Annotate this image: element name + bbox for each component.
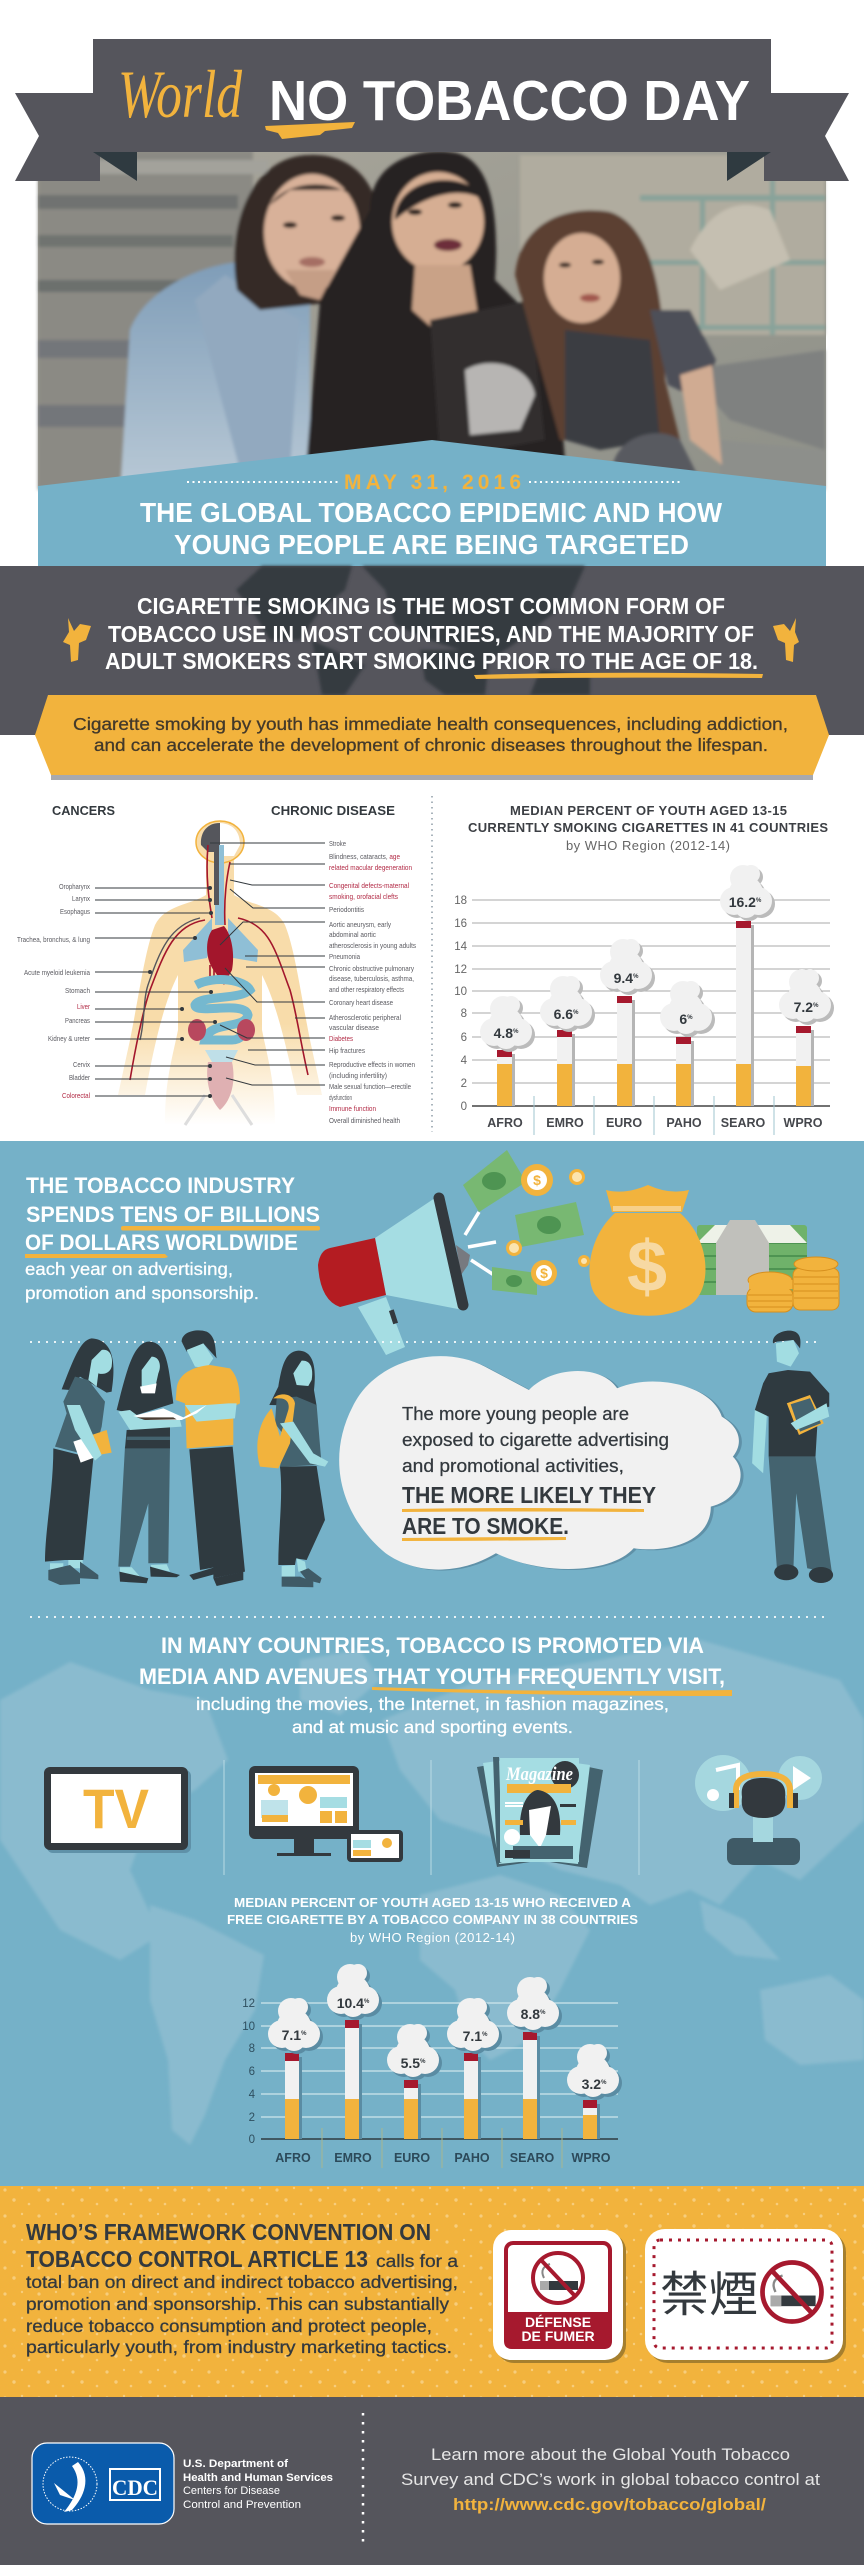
x axis labels: SEARO	[721, 1116, 766, 1130]
bar: EMRO 10.4: %	[364, 1999, 370, 2005]
chart title: CURRENTLY SMOKING CIGARETTES IN 41 COUNTRIES	[468, 820, 828, 835]
grid lines and axis	[472, 900, 830, 1106]
cancer labels: Bladder	[69, 1073, 90, 1082]
y axis labels: 14	[454, 941, 468, 953]
learn more text: Learn more about the Global Youth Tobacco	[431, 2445, 790, 2464]
bar: WPRO 7.2: 7.2	[794, 999, 813, 1015]
cancer labels: Acute myeloid leukemia	[24, 968, 91, 977]
bar: WPRO 3.2	[567, 2044, 622, 2139]
student: girl with book	[45, 1338, 114, 1585]
title: World script: World	[118, 56, 243, 132]
y axis labels: 6	[461, 1032, 467, 1044]
human body illustration	[118, 821, 322, 1125]
chronic disease labels: vascular disease	[329, 1023, 379, 1032]
heading and body text	[26, 2219, 458, 2357]
y axis labels: 2	[249, 2112, 255, 2124]
heading: promotion via media	[139, 1633, 725, 1737]
text: tobacco industry spending: each year on advertising,	[25, 1259, 233, 1279]
bar: WPRO 3.2: 3.2	[582, 2076, 601, 2092]
icon: right star with stem	[773, 618, 799, 662]
panel: body diagram of smoking diseases	[17, 796, 432, 1132]
callout: health consequences ribbon: Cigarette smoking by youth has immediate health consequences, including addiction,	[73, 714, 788, 734]
bar: EURO 5.5: %	[420, 2059, 426, 2065]
text: tobacco industry spending: THE TOBACCO INDUSTRY	[26, 1173, 295, 1198]
divider: dotted rule	[30, 1616, 828, 1618]
bar: EMRO 6.6: 6.6	[554, 1006, 573, 1022]
chronic disease labels: abdominal aortic	[329, 930, 376, 939]
cancer labels: Colorectal	[62, 1091, 90, 1100]
y axis labels: 8	[249, 2043, 255, 2055]
bar: PAHO 7.1: %	[482, 2032, 488, 2038]
heading: promotion via media: IN MANY COUNTRIES, TOBACCO IS PROMOTED VIA	[161, 1633, 704, 1658]
panel: cigarette smoking statement	[0, 566, 864, 735]
cancer labels: Kidney & ureter	[48, 1034, 90, 1043]
icon: TV	[44, 1767, 191, 1853]
bar: EMRO 10.4: 10.4	[337, 1995, 364, 2011]
heading: promotion via media: MEDIA AND AVENUES THAT YOUTH FREQUENTLY VISIT,	[139, 1664, 725, 1689]
learn more text: http://www.cdc.gov/tobacco/global/	[453, 2495, 766, 2514]
sign: no smoking in Chinese	[645, 2229, 846, 2363]
banner: left fold	[93, 152, 137, 181]
y axis labels: 10	[454, 986, 467, 998]
x axis labels: PAHO	[454, 2151, 490, 2165]
illustration: four students	[45, 1330, 328, 1587]
icon: left star with stem	[63, 618, 91, 662]
agency name: U.S. Department of	[183, 2458, 288, 2470]
bar: PAHO 7.1: 7.1	[463, 2028, 482, 2044]
heading and body text: WHO’S FRAMEWORK CONVENTION ON	[26, 2219, 431, 2245]
banner: right fold	[727, 152, 771, 181]
chart: median percent of youth currently smoking	[454, 803, 834, 1135]
chart title: by WHO Region (2012-14)	[566, 838, 730, 853]
student: girl with backpack	[257, 1351, 328, 1587]
title: brush underline	[265, 122, 355, 139]
underline: that youth frequently visit	[372, 1687, 732, 1696]
brush underline	[474, 673, 763, 679]
underline: are to smoke	[402, 1537, 566, 1541]
cancer labels: Esophagus	[60, 907, 90, 916]
bar: AFRO 4.8	[480, 996, 535, 1106]
callout: health consequences ribbon: and can accelerate the development of chronic diseases throughout the lifespan.	[94, 735, 768, 755]
chronic disease labels: Coronary heart disease	[329, 998, 393, 1007]
statement text	[105, 593, 758, 674]
student: boy in orange shirt	[133, 1330, 245, 1586]
agency name: Control and Prevention	[183, 2499, 301, 2511]
heading and body text: promotion and sponsorship. This can substantially	[26, 2294, 449, 2314]
callout: cloud with exposure message	[339, 1356, 744, 1571]
y axis labels: 18	[454, 895, 467, 907]
x axis labels: AFRO	[487, 1116, 523, 1130]
bar: AFRO 4.8: %	[513, 1029, 519, 1035]
cancer labels: Trachea, bronchus, & lung	[17, 935, 90, 944]
panel: blue background	[0, 1141, 864, 2186]
bar: PAHO 6: 6	[679, 1011, 687, 1027]
chronic disease labels: related macular degeneration	[329, 863, 412, 872]
chronic disease labels: Reproductive effects in women	[329, 1060, 415, 1069]
heading and body text: particularly youth, from industry marketing tactics.	[26, 2337, 452, 2357]
chart title: by WHO Region (2012-14)	[350, 1930, 515, 1945]
chronic disease labels: (including infertility)	[329, 1071, 387, 1080]
agency name: Health and Human Services	[183, 2472, 333, 2484]
date: MAY 31, 2016	[344, 471, 521, 494]
bar: EMRO 6.6	[540, 976, 595, 1106]
logo: HHS and CDC	[32, 2443, 174, 2524]
chronic disease labels: Atherosclerotic peripheral	[329, 1013, 401, 1022]
sign: no smoking in Chinese: 禁煙	[660, 2255, 758, 2325]
x axis labels: SEARO	[510, 2151, 555, 2165]
bar: EMRO 10.4	[327, 1964, 382, 2139]
text: tobacco industry spending: promotion and sponsorship.	[25, 1283, 259, 1303]
icon: coins	[506, 1164, 590, 1286]
divider: dotted rule	[30, 1341, 818, 1343]
bar: EURO 9.4: 9.4	[614, 970, 633, 986]
bar: AFRO 7.1: %	[301, 2031, 307, 2037]
x axis labels	[487, 1116, 823, 1130]
bar: PAHO 6	[660, 981, 715, 1106]
x axis labels: WPRO	[784, 1116, 823, 1130]
bar: AFRO 7.1: 7.1	[282, 2027, 301, 2043]
illustration: boy with book on right	[752, 1331, 833, 1583]
photo: three young women on stone steps	[38, 150, 826, 490]
chart title: FREE CIGARETTE BY A TOBACCO COMPANY IN 38 COUNTRIES	[227, 1913, 638, 1927]
learn more text	[401, 2445, 820, 2514]
y axis labels: 4	[461, 1055, 468, 1067]
banner: left ribbon tail	[15, 93, 100, 181]
bar: WPRO 7.2: %	[813, 1003, 819, 1009]
icon: cash stack	[697, 1220, 807, 1295]
chronic disease labels: dysfunction	[329, 1093, 352, 1102]
chronic disease labels: Overall diminished health	[329, 1116, 400, 1125]
bar: WPRO 3.2: %	[601, 2080, 607, 2086]
chronic disease labels: disease, tuberculosis, asthma,	[329, 974, 414, 983]
chronic disease labels: Pneumonia	[329, 952, 361, 961]
bar: SEARO 8.8: %	[540, 2010, 546, 2016]
x axis labels	[275, 2151, 611, 2165]
chronic disease labels: Immune function	[329, 1104, 376, 1113]
x axis labels: PAHO	[666, 1116, 702, 1130]
icon: sound lines	[465, 1212, 496, 1275]
y axis labels: 2	[461, 1078, 467, 1090]
underline: the more likely they	[402, 1508, 644, 1512]
y axis labels: 0	[461, 1101, 467, 1113]
bar: SEARO 8.8: 8.8	[521, 2006, 540, 2022]
callout: cloud with exposure message: The more young people are	[402, 1404, 629, 1424]
chronic disease labels: Blindness, cataracts, age	[329, 852, 400, 861]
statement text: TOBACCO USE IN MOST COUNTRIES, AND THE MAJORITY OF	[108, 621, 754, 647]
chart title	[227, 1896, 638, 1945]
heading and body text: calls for a	[376, 2251, 458, 2271]
y axis labels: 10	[242, 2021, 255, 2033]
callout: cloud with exposure message: THE MORE LIKELY THEY	[402, 1482, 656, 1508]
grid lines and axis	[261, 2003, 618, 2117]
statement text: ADULT SMOKERS START SMOKING PRIOR TO THE AGE OF 18.	[105, 648, 758, 674]
y axis labels: 6	[249, 2066, 255, 2078]
learn more text: Survey and CDC’s work in global tobacco control at	[401, 2470, 820, 2489]
title banner	[93, 39, 771, 152]
bar: EURO 5.5: 5.5	[401, 2055, 420, 2071]
icon: TV: TV	[83, 1777, 149, 1840]
underline: tens of billions	[121, 1226, 320, 1230]
bar: AFRO 7.1	[268, 1998, 323, 2139]
vertical dotted divider	[362, 2413, 364, 2547]
underline: of dollars	[25, 1254, 168, 1258]
region separators	[534, 1096, 774, 1135]
statement text: CIGARETTE SMOKING IS THE MOST COMMON FORM OF	[137, 593, 725, 619]
subtitle: THE GLOBAL TOBACCO EPIDEMIC AND HOW	[140, 497, 723, 528]
y axis labels: 16	[454, 918, 467, 930]
agency name: Centers for Disease	[183, 2485, 280, 2497]
region separators	[322, 2128, 562, 2168]
callout: health consequences ribbon	[35, 695, 829, 780]
callout: cloud with exposure message: exposed to cigarette advertising	[402, 1430, 669, 1450]
chronic disease labels: Chronic obstructive pulmonary	[329, 964, 414, 973]
chronic disease labels: Periodontitis	[329, 905, 364, 914]
cancer leader lines	[95, 886, 217, 1098]
bar: AFRO 4.8: 4.8	[494, 1025, 513, 1041]
heading and body text: reduce tobacco consumption and protect people,	[26, 2316, 432, 2336]
chronic disease labels: atherosclerosis in young adults	[329, 941, 416, 950]
logo: HHS and CDC: CDC	[112, 2475, 158, 2500]
bar: PAHO 6: %	[687, 1015, 693, 1021]
chronic disease leader lines	[210, 843, 325, 1085]
bar: SEARO 16.2	[720, 865, 775, 1106]
chronic disease labels: Hip fractures	[329, 1046, 365, 1055]
bar: WPRO 7.2	[779, 969, 834, 1106]
banner: right ribbon tail	[764, 93, 849, 181]
dotted rule right	[529, 481, 683, 483]
x axis labels: AFRO	[275, 2151, 311, 2165]
icon: coin stacks	[747, 1257, 839, 1312]
student: girl reading	[117, 1342, 182, 1583]
dotted rule left	[187, 481, 338, 483]
icon: money bag: $	[627, 1227, 667, 1307]
vertical dotted divider	[431, 796, 433, 1132]
text: tobacco industry spending	[25, 1173, 320, 1303]
bar: SEARO 8.8	[507, 1977, 562, 2139]
heading: promotion via media: including the movies, the Internet, in fashion magazines,	[196, 1694, 669, 1714]
y axis labels	[242, 1998, 256, 2146]
heading and body text: TOBACCO CONTROL ARTICLE 13	[26, 2246, 368, 2272]
bar: SEARO 16.2: 16.2	[729, 894, 756, 910]
bar: EMRO 6.6: %	[573, 1010, 579, 1016]
callout: cloud with exposure message: ARE TO SMOKE.	[402, 1513, 569, 1539]
chronic disease labels: Aortic aneurysm, early	[329, 920, 391, 929]
bar: SEARO 16.2: %	[756, 898, 762, 904]
world map background	[0, 1640, 864, 2145]
cancer labels: Oropharynx	[59, 882, 90, 891]
icon: magazines	[477, 1757, 603, 1868]
cancer labels	[17, 882, 91, 1100]
chronic disease labels: Male sexual function—erectile	[329, 1082, 411, 1091]
callout: cloud with exposure message: and promotional activities,	[402, 1456, 624, 1476]
chronic disease labels: Stroke	[329, 839, 346, 848]
cancer labels: Liver	[77, 1002, 90, 1011]
text: tobacco industry spending: SPENDS TENS OF BILLIONS	[26, 1202, 320, 1227]
text: tobacco industry spending: OF DOLLARS WORLDWIDE	[25, 1230, 298, 1255]
cancer labels: Cervix	[73, 1060, 90, 1069]
y axis labels: 12	[454, 964, 467, 976]
heading: promotion via media: and at music and sporting events.	[292, 1717, 573, 1737]
subtitle	[140, 497, 723, 560]
cancer labels: Pancreas	[65, 1016, 90, 1025]
agency name	[183, 2458, 333, 2511]
y axis labels: 0	[249, 2134, 255, 2146]
chronic disease labels: smoking, orofacial clefts	[329, 892, 398, 901]
panel: WHO framework convention	[0, 2186, 864, 2397]
chronic disease labels: Diabetes	[329, 1034, 353, 1043]
chronic disease labels: Congenital defects-maternal	[329, 881, 409, 890]
icon: coins: $	[540, 1265, 548, 1281]
bar: EURO 9.4	[600, 939, 655, 1106]
icon: money bag	[590, 1185, 705, 1316]
chart: free cigarette from tobacco company	[227, 1896, 638, 2168]
y axis labels: 4	[249, 2089, 256, 2101]
chart title: MEDIAN PERCENT OF YOUTH AGED 13-15 WHO RECEIVED A	[234, 1896, 631, 1910]
icon: music headphones	[695, 1755, 822, 1865]
panel: footer	[0, 2397, 864, 2565]
media separators	[224, 1760, 639, 1875]
x axis labels: EMRO	[546, 1116, 584, 1130]
sign: defense de fumer: DE FUMER	[521, 2328, 595, 2344]
x axis labels: WPRO	[572, 2151, 611, 2165]
icon: dollar bills	[463, 1150, 584, 1295]
y axis labels: 8	[461, 1008, 467, 1020]
chart title: MEDIAN PERCENT OF YOUTH AGED 13-15	[510, 803, 787, 818]
x axis labels: EURO	[394, 2151, 430, 2165]
x axis labels: EURO	[606, 1116, 642, 1130]
y axis labels: 12	[242, 1998, 255, 2010]
sign: defense de fumer: DÉFENSE	[525, 2314, 591, 2330]
x axis labels: EMRO	[334, 2151, 372, 2165]
title: NO TOBACCO DAY: NO TOBACCO DAY	[269, 69, 750, 133]
heading: cancers: CANCERS	[52, 803, 115, 818]
bar: PAHO 7.1	[447, 1998, 502, 2139]
cancer labels: Stomach	[65, 986, 90, 995]
bar: EURO 9.4: %	[633, 974, 639, 980]
panel: date and subtitle	[38, 440, 826, 566]
icon: megaphone	[318, 1198, 470, 1355]
icon: coins: $	[533, 1172, 541, 1188]
sign: defense de fumer	[493, 2230, 626, 2363]
cancer labels: Larynx	[72, 894, 90, 903]
bar: EURO 5.5	[387, 2024, 442, 2139]
world map silhouette	[236, 566, 590, 695]
icon: magazines: Magazine	[505, 1764, 573, 1785]
y axis labels	[454, 895, 468, 1113]
heading and body text: total ban on direct and indirect tobacco advertising,	[26, 2272, 458, 2292]
chronic disease labels: and other respiratory effects	[329, 985, 404, 994]
subtitle: YOUNG PEOPLE ARE BEING TARGETED	[174, 529, 689, 560]
icon: computer and tablet	[249, 1766, 403, 1862]
chart title	[468, 803, 828, 853]
chronic disease labels	[329, 839, 416, 1125]
heading: chronic disease: CHRONIC DISEASE	[271, 803, 395, 818]
